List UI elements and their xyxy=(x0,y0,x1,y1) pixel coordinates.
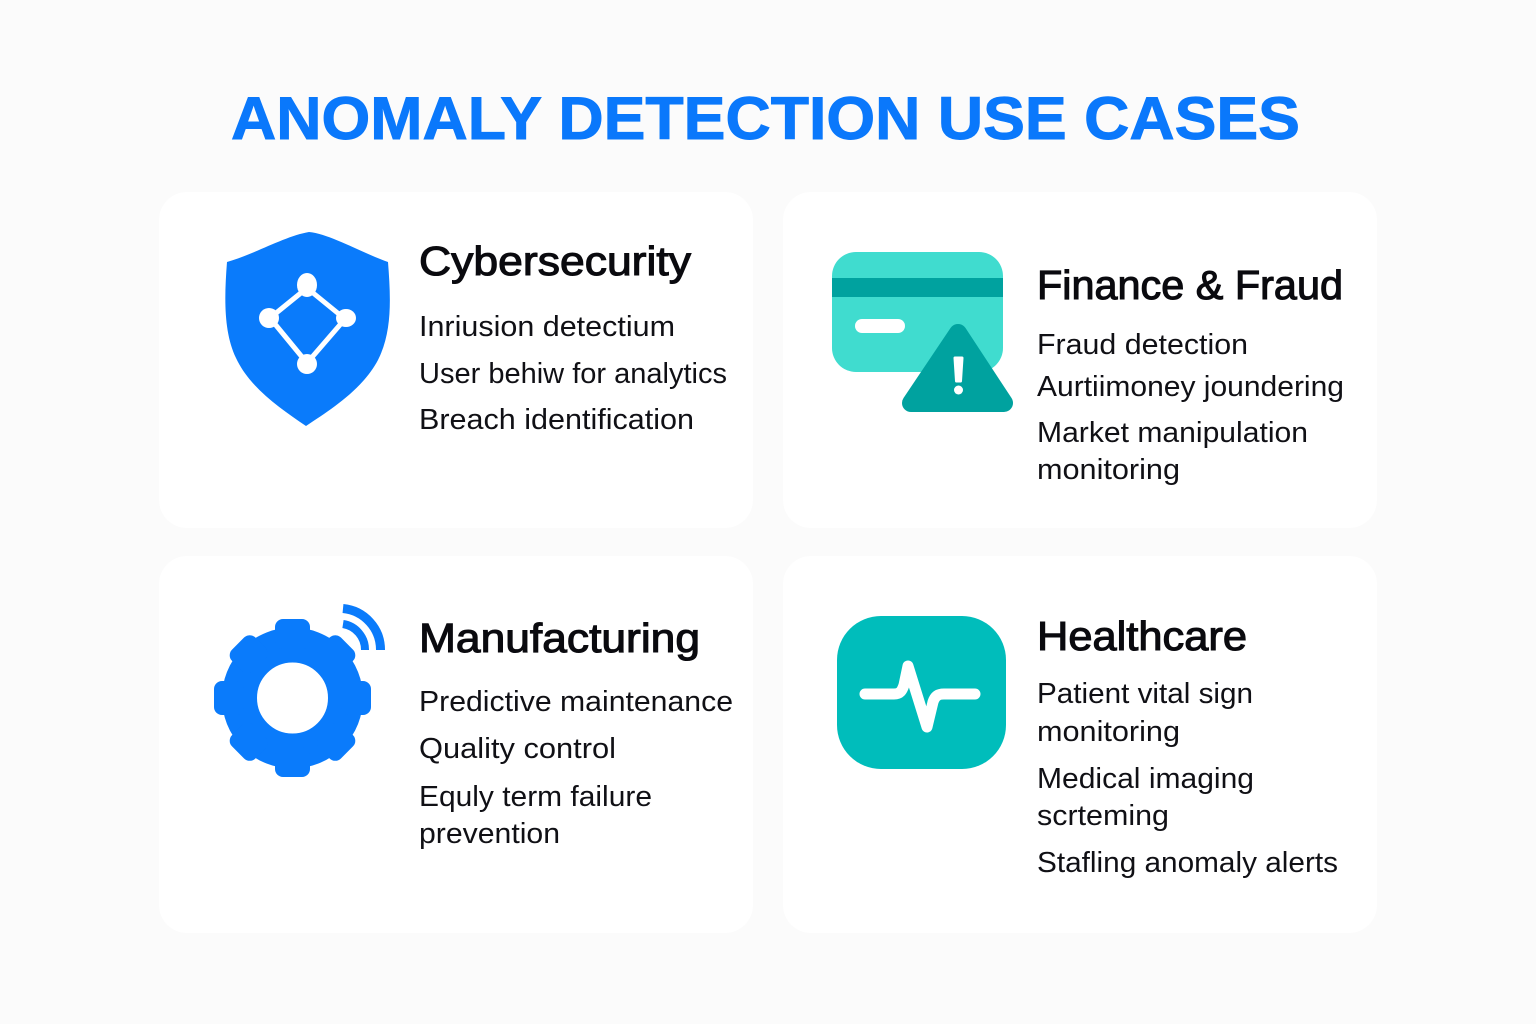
icon: gear with signal xyxy=(214,608,381,777)
text block: manufacturing items: Equly term failure xyxy=(419,781,652,813)
text block: healthcare items xyxy=(1037,678,1338,879)
heading: manufacturing: Manufacturing xyxy=(419,615,700,661)
text block: cybersecurity items: Inriusion detectium xyxy=(419,311,675,343)
title: ANOMALY DETECTION USE CASES xyxy=(231,85,1300,152)
heading: cybersecurity: Cybersecurity xyxy=(419,238,692,284)
panel: finance and fraud xyxy=(783,192,1377,528)
icon: shield with network xyxy=(225,232,390,426)
text block: healthcare items: Patient vital sign xyxy=(1037,678,1253,710)
icon: heartbeat monitor xyxy=(837,616,1006,769)
text block: manufacturing items: Quality control xyxy=(419,733,616,765)
panel: manufacturing xyxy=(159,556,753,933)
panel: healthcare xyxy=(783,556,1377,933)
text block: finance items: Market manipulation xyxy=(1037,417,1308,449)
text block: healthcare items: scrteming xyxy=(1037,800,1169,832)
text block: finance items: Fraud detection xyxy=(1037,329,1248,361)
text block: healthcare items: monitoring xyxy=(1037,716,1180,748)
text block: cybersecurity items: User behiw for analytics xyxy=(419,358,727,390)
text block: cybersecurity items xyxy=(419,311,727,436)
text block: finance items xyxy=(1037,329,1344,486)
text block: cybersecurity items: Breach identification xyxy=(419,404,694,436)
text block: manufacturing items xyxy=(419,686,733,850)
text block: manufacturing items: Predictive maintenance xyxy=(419,686,733,718)
text block: finance items: monitoring xyxy=(1037,454,1180,486)
text block: finance items: Aurtiimoney joundering xyxy=(1037,371,1344,403)
heading: healthcare: Healthcare xyxy=(1037,613,1247,659)
text block: healthcare items: Stafling anomaly alerts xyxy=(1037,847,1338,879)
icon: credit card with warning xyxy=(832,252,1004,403)
text block: manufacturing items: prevention xyxy=(419,818,560,850)
panel: cybersecurity xyxy=(159,192,753,528)
text block: healthcare items: Medical imaging xyxy=(1037,763,1254,795)
heading: finance and fraud: Finance & Fraud xyxy=(1037,262,1343,308)
